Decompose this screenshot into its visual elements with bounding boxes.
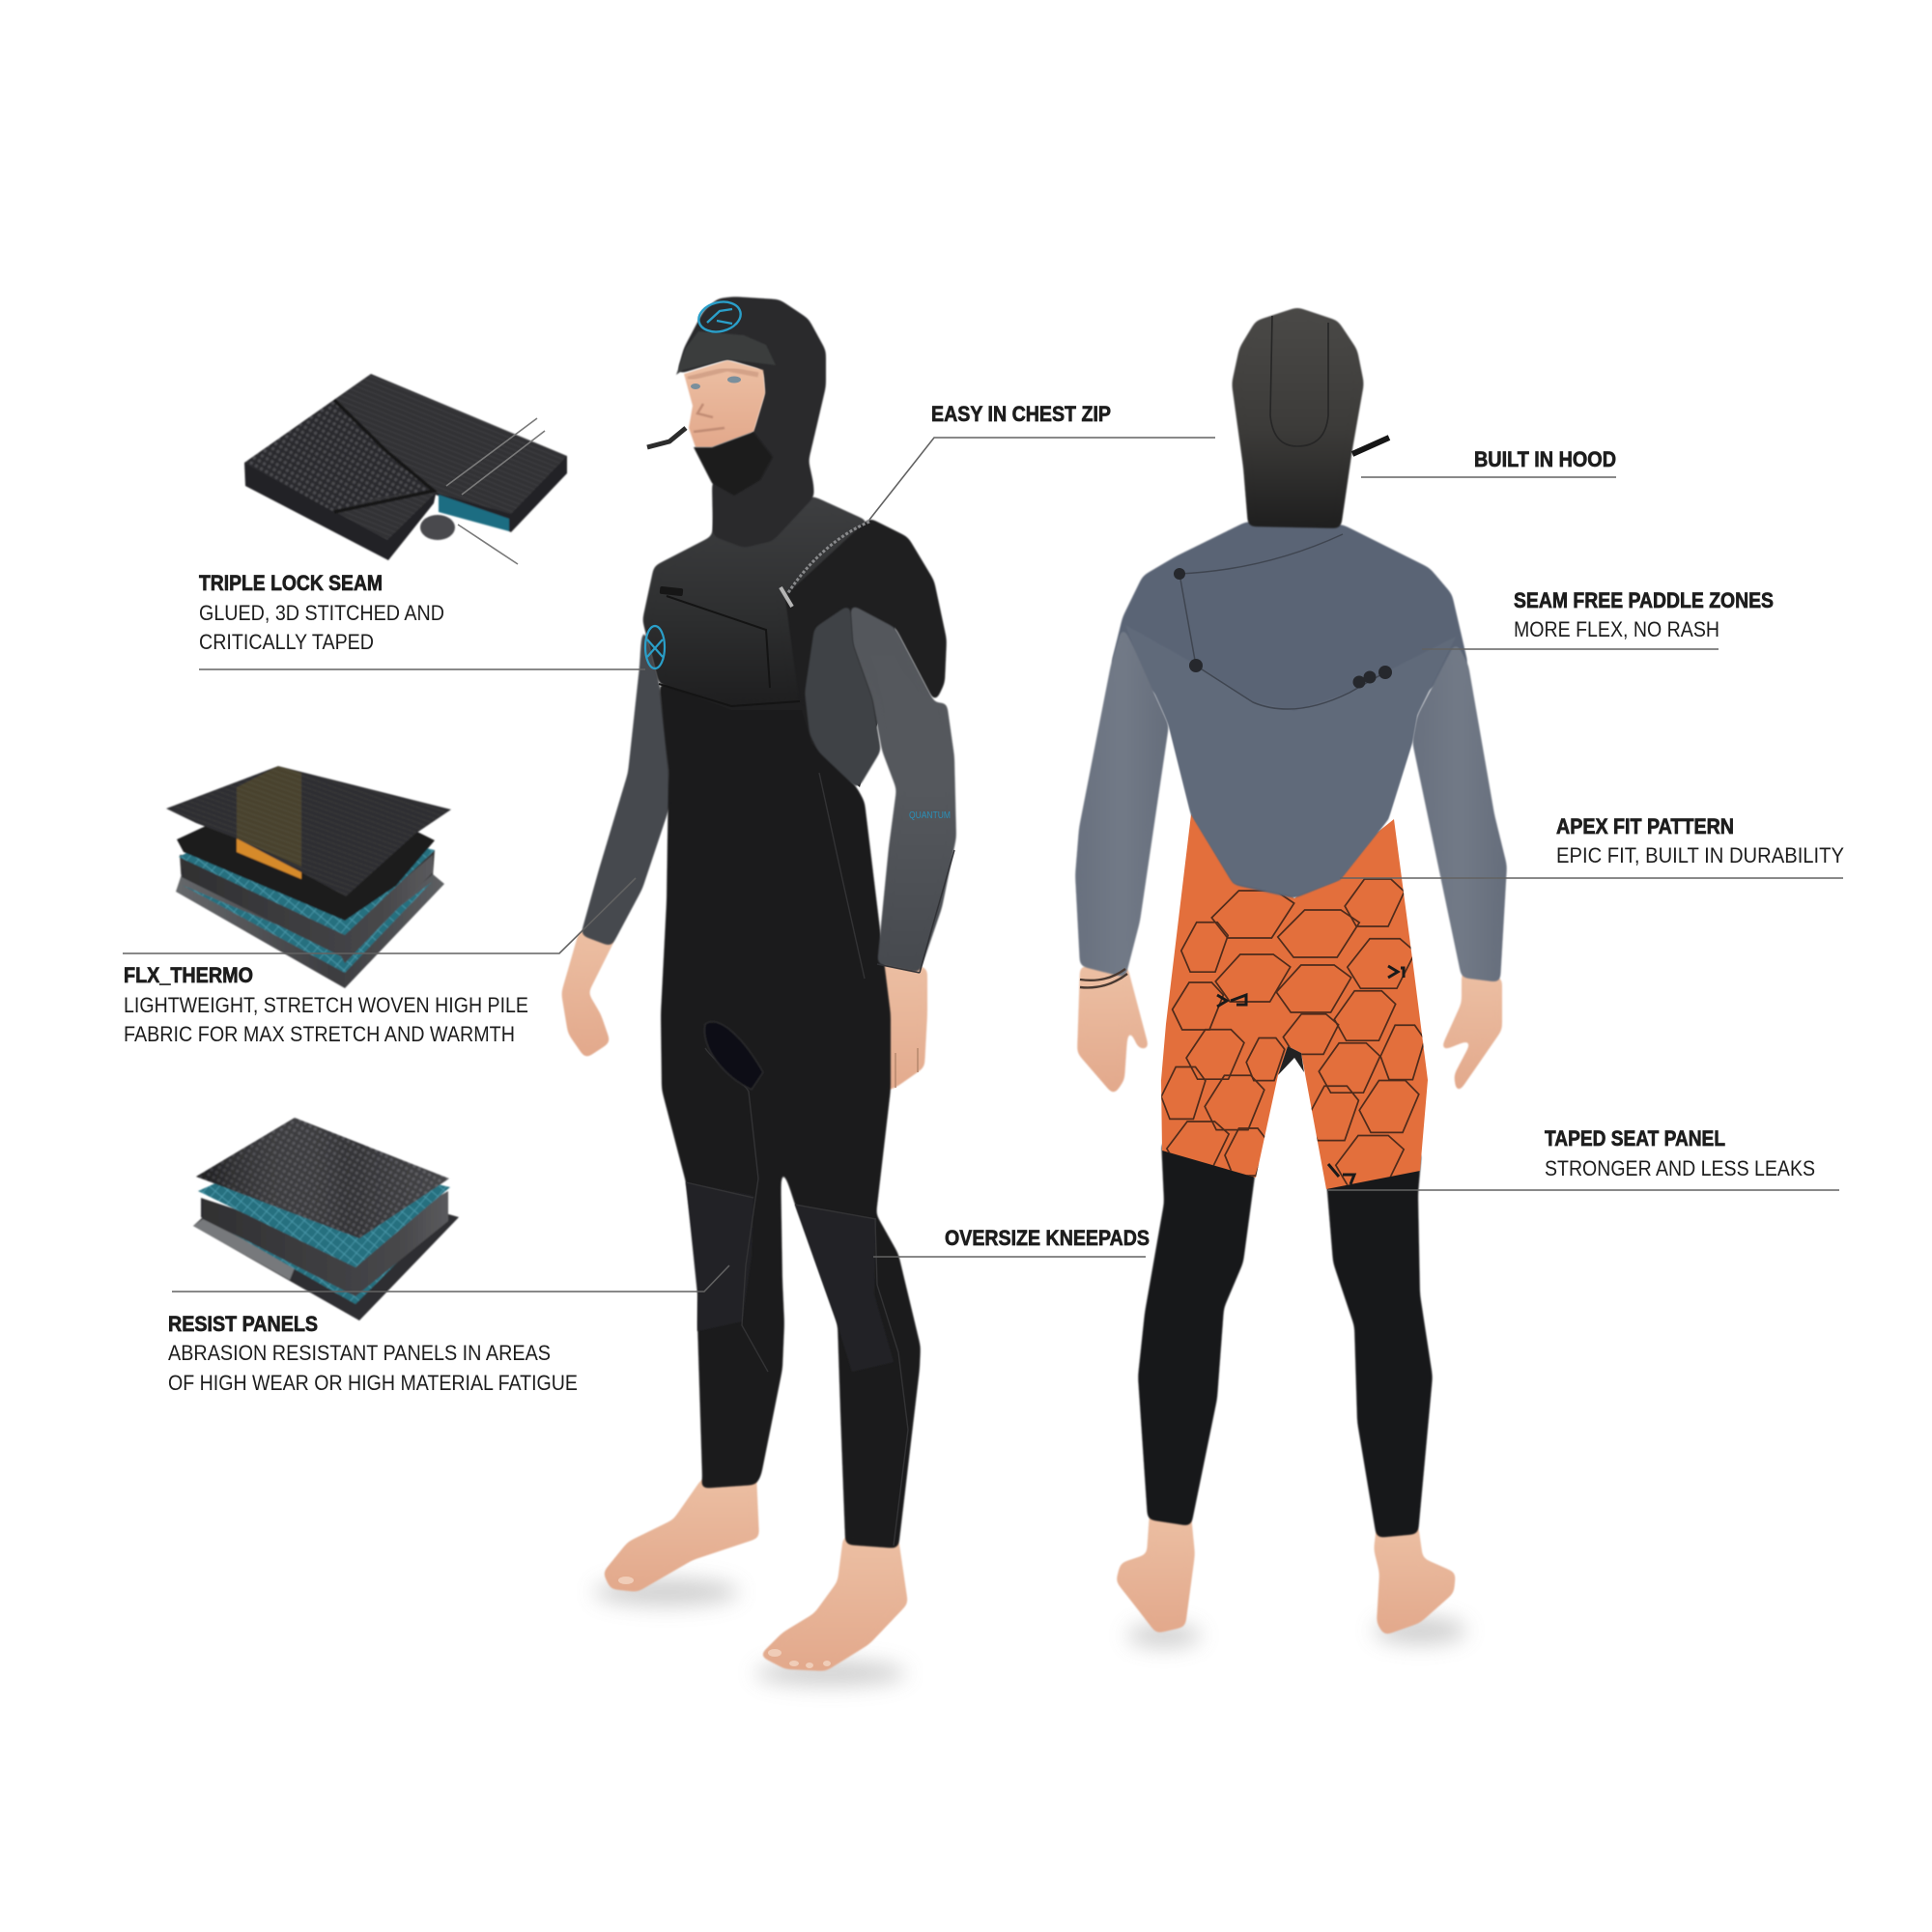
back left sleeve: [1075, 625, 1169, 978]
paddle zone: [1125, 625, 1456, 896]
label: resist panels: OF HIGH WEAR OR HIGH MATERIAL FATIGUE: [168, 1371, 578, 1395]
hood: [676, 297, 826, 548]
label: easy in chest zip: EASY IN CHEST ZIP: [931, 402, 1111, 426]
gray left strip: [193, 1219, 296, 1280]
heat core: [237, 838, 301, 879]
bracelet: [1080, 969, 1127, 987]
foam core: [182, 855, 433, 963]
heat glow: [237, 766, 301, 867]
visor: [676, 331, 776, 375]
hood logo: [696, 298, 744, 336]
seam dots: [1174, 568, 1392, 688]
label: flx thermo: LIGHTWEIGHT, STRETCH WOVEN HIGH PILE: [124, 993, 528, 1017]
front chest panel: [642, 497, 869, 706]
front feet: [603, 1474, 908, 1671]
sleeve wordmark: QUANTUM: [909, 810, 951, 821]
back torso and yoke: [1111, 522, 1468, 898]
label: apex fit pattern: APEX FIT PATTERN: [1556, 814, 1734, 838]
nose and mouth: [694, 404, 724, 432]
chest zip: [787, 522, 869, 594]
black layer: [177, 826, 435, 921]
label: seam free paddle zones: [1514, 588, 1774, 641]
bottom layer: [193, 1208, 459, 1321]
eyes: [691, 377, 741, 389]
back feet: [1116, 1512, 1456, 1635]
label: apex fit pattern: [1556, 814, 1844, 867]
bottom mesh: [208, 1215, 444, 1304]
label: triple lock seam: [199, 571, 444, 654]
infographic canvas: [123, 296, 1843, 1695]
front underarm gusset: [805, 604, 881, 789]
label: apex fit pattern: EPIC FIT, BUILT IN DURABILITY: [1556, 843, 1844, 867]
front left sleeve: [581, 618, 671, 947]
label: resist panels: RESIST PANELS: [168, 1312, 318, 1336]
zip puller: [781, 587, 792, 607]
dimpled neoprene area: [244, 400, 434, 512]
top sheet: [166, 766, 451, 896]
bottom mesh: [182, 882, 432, 973]
callout lines: [123, 418, 1843, 1292]
teal core: [439, 495, 509, 531]
brow shade: [688, 369, 758, 379]
face: [684, 360, 765, 447]
label: seam free paddle zones: SEAM FREE PADDLE ZONES: [1514, 588, 1774, 612]
chest pocket seam: [659, 596, 800, 706]
label: flx thermo: FLX_THERMO: [124, 963, 253, 987]
label: triple lock seam: CRITICALLY TAPED: [199, 630, 374, 654]
foot shadows: [594, 1578, 1466, 1686]
back toggle: [1352, 438, 1389, 454]
drawstring: [647, 428, 686, 447]
hood stitching: [1270, 316, 1328, 446]
front right sleeve: [850, 604, 956, 973]
stack backing: [180, 850, 435, 976]
label: taped seat panel: STRONGER AND LESS LEAKS: [1545, 1156, 1815, 1180]
foam core: [201, 1191, 448, 1296]
front hands: [561, 929, 927, 1106]
top sheet: [196, 1118, 449, 1238]
back wetsuit figure: [1075, 307, 1507, 1635]
material block: triple lock seam: [244, 374, 567, 560]
orange seat panel: [1161, 814, 1428, 1189]
material block: resist panels: [193, 1118, 459, 1321]
label: triple lock seam: GLUED, 3D STITCHED AND: [199, 601, 444, 625]
crotch gap: [1278, 1046, 1304, 1075]
front crotch panel: [704, 1022, 763, 1090]
label: built in hood: BUILT IN HOOD: [1474, 447, 1616, 471]
front shoulder: [785, 518, 947, 752]
front kneepads: [686, 1182, 894, 1372]
front toes: [618, 1577, 831, 1668]
label: flx thermo: FABRIC FOR MAX STRETCH AND WARMTH: [124, 1022, 515, 1046]
block top: [244, 374, 567, 540]
back hands: [1077, 966, 1502, 1095]
bottom layer: [176, 874, 444, 988]
seam stitch: [334, 400, 434, 512]
sleeve cuff seam: [877, 850, 954, 973]
seat panel logos: [1217, 966, 1404, 1184]
hexagon pattern: [1161, 879, 1425, 1187]
label: triple lock seam: TRIPLE LOCK SEAM: [199, 571, 383, 595]
front body and legs: [659, 682, 921, 1548]
back seams: [1179, 534, 1385, 709]
top sheet sheen: [196, 1118, 449, 1238]
label: resist panels: ABRASION RESISTANT PANELS IN AREAS: [168, 1341, 551, 1365]
back legs: [1138, 1140, 1433, 1538]
label: flx thermo: [124, 963, 528, 1046]
back right sleeve: [1412, 641, 1507, 982]
back hood: [1232, 307, 1364, 528]
mesh layer: [198, 1150, 450, 1267]
chin flap: [694, 432, 773, 496]
label: taped seat panel: [1545, 1126, 1815, 1180]
finger gaps: [869, 1048, 918, 1094]
torso underlay: [667, 512, 898, 787]
block sides: [244, 456, 567, 560]
label: seam free paddle zones: MORE FLEX, NO RASH: [1514, 617, 1719, 641]
front wetsuit figure: [561, 297, 956, 1671]
label: resist panels: [168, 1312, 578, 1395]
chest logo: [645, 626, 665, 668]
label: oversize kneepads: OVERSIZE KNEEPADS: [945, 1226, 1150, 1250]
front seams: [686, 773, 908, 1546]
chest pull: [660, 586, 683, 596]
mesh layer: [179, 811, 435, 935]
label: taped seat panel: TAPED SEAT PANEL: [1545, 1126, 1725, 1151]
material block: flx thermo: [166, 766, 451, 988]
seam bead: [420, 515, 455, 540]
